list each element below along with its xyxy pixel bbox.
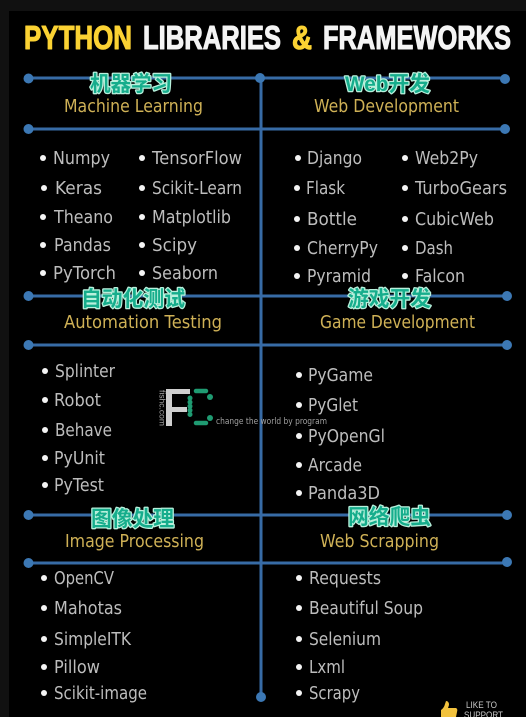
title: & <box>292 19 312 56</box>
list: Automation Testing tools: PyUnit <box>54 449 105 469</box>
list: Machine Learning libraries: Scipy <box>152 236 197 256</box>
list: Web Development frameworks: CubicWeb <box>415 210 494 230</box>
list: Web Scrapping libraries: Selenium <box>309 630 381 650</box>
callout: like to support: LIKE TO <box>466 700 497 710</box>
list: Web Development frameworks: TurboGears <box>414 179 507 199</box>
list: Automation Testing tools: Robot <box>54 391 101 411</box>
list: Web Development frameworks <box>294 149 507 287</box>
heading: Image Processing: 图像处理 <box>91 508 174 531</box>
list: Web Development frameworks: Django <box>307 149 362 169</box>
list: Automation Testing tools: Behave <box>55 421 112 441</box>
title <box>24 19 511 56</box>
heading: Web Scrapping: 网络爬虫 <box>348 505 431 529</box>
heading: Web Development: Web Development <box>314 96 459 117</box>
list: Web Scrapping libraries: Scrapy <box>309 684 360 704</box>
list: Image Processing libraries: Pillow <box>54 658 100 678</box>
list: Machine Learning libraries: Seaborn <box>152 264 218 284</box>
callout: like to support <box>464 700 503 717</box>
list: Web Scrapping libraries: Lxml <box>309 658 345 678</box>
heading: Machine Learning <box>64 72 203 117</box>
title: PYTHON <box>24 19 132 56</box>
list: Web Development frameworks: Pyramid <box>307 267 371 287</box>
list: Game Development libraries: Arcade <box>308 456 362 476</box>
heading: Web Scrapping: Web Scrapping <box>320 531 439 552</box>
heading: Web Scrapping <box>320 505 439 552</box>
list: Web Scrapping libraries <box>296 569 423 704</box>
list: Game Development libraries: PyOpenGl <box>308 427 385 447</box>
watermark: FC logo <box>158 389 327 427</box>
list: Automation Testing tools: Splinter <box>55 362 116 382</box>
heading: Game Development: 游戏开发 <box>348 288 431 311</box>
list: Web Development frameworks: Bottle <box>307 210 357 230</box>
list: Game Development libraries <box>296 366 385 504</box>
list: Web Development frameworks: CherryPy <box>307 239 378 259</box>
list: Automation Testing tools <box>42 362 116 496</box>
heading: Game Development <box>320 288 475 333</box>
list: Web Development frameworks: Falcon <box>415 267 465 287</box>
list: Web Development frameworks: Dash <box>415 239 453 259</box>
heading: Machine Learning: 机器学习 <box>90 72 172 96</box>
list: Image Processing libraries: SimpleITK <box>54 630 131 650</box>
list: Image Processing libraries: OpenCV <box>54 569 114 589</box>
list: Automation Testing tools: PyTest <box>54 476 104 496</box>
watermark: FC logo: fishc.com <box>158 390 166 426</box>
list: Web Scrapping libraries: Requests <box>309 569 381 589</box>
icon: thumbs up <box>441 701 457 717</box>
list: Machine Learning libraries: Keras <box>55 179 102 199</box>
heading: Machine Learning: Machine Learning <box>64 96 203 117</box>
list: Game Development libraries: Panda3D <box>308 484 380 504</box>
list: Machine Learning libraries: Pandas <box>54 236 111 256</box>
list: Image Processing libraries <box>41 569 147 704</box>
list: Machine Learning libraries: Theano <box>53 208 113 228</box>
list: Game Development libraries: PyGlet <box>308 396 358 416</box>
heading: Web Development <box>314 73 459 117</box>
heading: Automation Testing: Automation Testing <box>64 312 222 333</box>
heading: Automation Testing: 自动化测试 <box>81 288 185 311</box>
heading: Web Development: Web开发 <box>345 73 430 96</box>
list: Web Development frameworks: Web2Py <box>415 149 478 169</box>
list: Machine Learning libraries: PyTorch <box>53 264 116 284</box>
list: Machine Learning libraries: Matplotlib <box>152 208 231 228</box>
list: Web Development frameworks: Flask <box>306 179 346 199</box>
heading: Image Processing: Image Processing <box>65 531 204 552</box>
heading: Image Processing <box>65 508 204 552</box>
list: Web Scrapping libraries: Beautiful Soup <box>309 599 423 619</box>
list: Machine Learning libraries <box>40 149 242 284</box>
watermark: FC logo: change the world by program <box>216 417 327 427</box>
list: Image Processing libraries: Mahotas <box>54 599 122 619</box>
list: Machine Learning libraries: TensorFlow <box>151 149 242 169</box>
list: Image Processing libraries: Scikit-image <box>54 684 147 704</box>
heading: Game Development: Game Development <box>320 312 475 333</box>
list: Machine Learning libraries: Scikit-Learn <box>152 179 242 199</box>
title: LIBRARIES <box>143 19 281 56</box>
list: Machine Learning libraries: Numpy <box>53 149 110 169</box>
heading: Automation Testing <box>64 288 222 333</box>
list: Game Development libraries: PyGame <box>308 366 373 386</box>
